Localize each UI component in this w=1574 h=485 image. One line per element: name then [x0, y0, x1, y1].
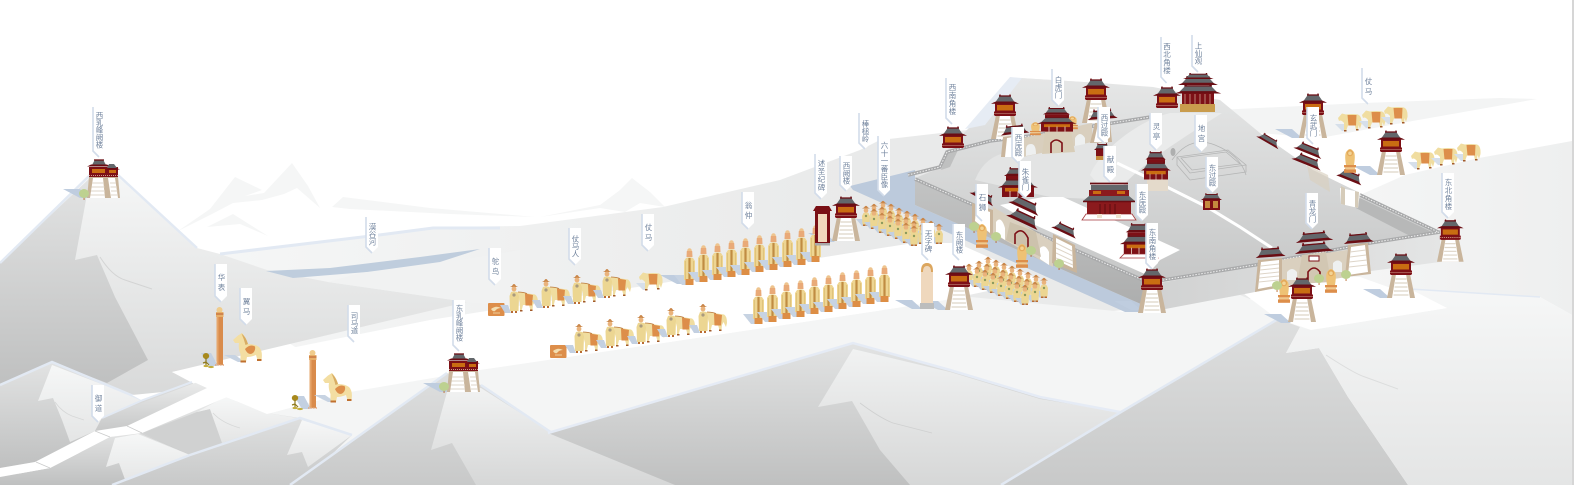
label: 棒槌岭: 棒槌岭 — [861, 119, 870, 144]
label: 御道 — [92, 385, 104, 422]
lion: south gate east — [1016, 244, 1028, 268]
pillar: 华表 — [201, 307, 224, 366]
underground palace outline: 地宫 — [1170, 142, 1246, 180]
label: 御道: 御道 — [94, 393, 103, 414]
tower: north gate right — [1377, 130, 1405, 175]
gate: 玄武门 — [1256, 94, 1365, 208]
label: 东庑殿 — [1136, 184, 1148, 221]
tower: 东阙楼 — [945, 266, 973, 310]
label: 青龙门 — [1306, 193, 1318, 229]
tree 2 — [439, 382, 449, 393]
relief: ostrich — [488, 303, 504, 316]
label: 上仙观: 上仙观 — [1194, 42, 1203, 66]
south inner plaza — [1000, 197, 1180, 275]
wall crests — [908, 116, 1440, 283]
tree — [79, 189, 89, 200]
mausoleum hill — [915, 78, 1440, 282]
label: 漠谷河 — [366, 217, 378, 253]
pillar: 华表 2 — [294, 350, 317, 409]
label: 白虎门: 白虎门 — [1054, 75, 1063, 100]
pavilion: 灵亭 — [1141, 151, 1171, 191]
label: 东阙楼 — [953, 224, 965, 260]
label: 仗马 (north-east): 仗马 — [1364, 76, 1373, 98]
stele: 无字碑 — [920, 263, 934, 309]
east plain — [1300, 141, 1572, 315]
tower: east gate right — [1387, 254, 1415, 298]
label: 西阙楼 — [840, 156, 852, 191]
north plain band — [1217, 98, 1537, 138]
winged horse 2 — [314, 373, 352, 402]
east wall face — [1143, 232, 1440, 310]
row: stone guards south — [743, 265, 890, 324]
label: 司马道 — [348, 305, 360, 342]
gate: 朱雀门 — [970, 185, 1079, 273]
hill light areas — [941, 77, 1432, 236]
label: 无字碑 — [922, 223, 934, 260]
label: 灵亭: 灵亭 — [1152, 122, 1161, 142]
gate: 青龙门 — [1255, 230, 1374, 292]
big left mountain — [0, 175, 467, 480]
trees: east gate — [1272, 270, 1351, 292]
label: 翁仲 — [742, 192, 754, 229]
label: 棒槌岭 — [859, 113, 871, 149]
temple: 上仙观 — [1175, 73, 1221, 112]
label: 西南角楼: 西南角楼 — [948, 83, 957, 116]
label: 述圣纪碑 — [815, 154, 827, 199]
row: horse and handlers south — [565, 304, 727, 353]
label: 西庑殿: 西庑殿 — [1014, 134, 1023, 158]
hall: 东庑殿 — [1120, 223, 1158, 258]
officials east group — [959, 257, 1048, 305]
label: 西乳峰阙楼 — [93, 107, 105, 157]
label: 鸵鸟 — [489, 248, 501, 285]
page edge — [1572, 0, 1574, 485]
trees: south gate — [969, 222, 1064, 270]
spirit road on the hill — [1117, 163, 1272, 248]
label: 东阙楼: 东阙楼 — [955, 230, 964, 255]
south wall face — [915, 180, 1143, 305]
label: 灵亭 — [1150, 113, 1162, 150]
label: 西阙楼: 西阙楼 — [842, 162, 851, 186]
tower: 西北角楼 — [1153, 86, 1181, 108]
label: 朱雀门: 朱雀门 — [1021, 167, 1030, 192]
tower: 西阙楼 — [832, 196, 860, 241]
relief: ostrich 2 — [550, 345, 566, 358]
label: 六十一蕃臣像 — [878, 136, 890, 196]
lion: east gate south — [1278, 279, 1290, 303]
blue shadow strip along south wall — [850, 170, 1143, 312]
label: 仗马: 仗马 — [644, 222, 653, 244]
label: 东过殿 — [1206, 157, 1218, 193]
horses: north-east row — [1335, 106, 1481, 170]
label: 玄武门: 玄武门 — [1309, 113, 1318, 138]
shrub — [203, 353, 214, 368]
label: 西北角楼 — [1161, 37, 1172, 83]
tower: 西乳峰阙楼 — [87, 160, 120, 198]
label: 石狮 — [976, 184, 988, 221]
label: 仗马人 — [569, 228, 581, 265]
shrub 2 — [292, 395, 303, 410]
label: 无字碑: 无字碑 — [924, 230, 933, 254]
stele: 述圣纪碑 — [813, 206, 832, 246]
hall: 东过殿 — [1201, 193, 1222, 210]
label: 华表: 华表 — [217, 272, 226, 294]
label: 仗马 (north-east) — [1362, 68, 1374, 104]
plaza: 青龙门 front — [1243, 277, 1447, 330]
label: 东南角楼: 东南角楼 — [1148, 227, 1157, 261]
label: 献殿: 献殿 — [1106, 154, 1115, 176]
label: 翁仲: 翁仲 — [744, 200, 753, 222]
gate: 白虎门 — [1000, 107, 1118, 157]
lower mountains — [112, 289, 1572, 485]
label: 上仙观 — [1192, 35, 1204, 72]
lion: east gate north — [1325, 269, 1337, 293]
label: 翼马 — [240, 288, 252, 325]
label: 西庑殿 — [1012, 127, 1024, 163]
label: 仗马人: 仗马人 — [571, 234, 580, 258]
label: 华表 — [215, 264, 227, 302]
label: 六十一蕃臣像: 六十一蕃臣像 — [880, 140, 889, 188]
label: 西乳峰阙楼: 西乳峰阙楼 — [95, 111, 104, 149]
label: 地宫 — [1195, 115, 1207, 152]
label: 司马道: 司马道 — [350, 312, 359, 336]
hall: 献殿 — [1082, 184, 1136, 220]
tower: east gate front — [1288, 278, 1316, 322]
label: 朱雀门 — [1019, 161, 1031, 198]
row: stone guards north — [674, 225, 821, 285]
label: 东乳峰阙楼: 东乳峰阙楼 — [455, 303, 464, 342]
lion: south gate west — [976, 224, 988, 248]
tower: 东南角楼 — [1138, 268, 1166, 313]
tower: 西南角楼 — [939, 126, 967, 148]
winged horse — [224, 333, 262, 362]
label: 仗马 — [642, 214, 654, 251]
tower: 东乳峰阙楼 — [447, 354, 480, 392]
label: 白虎门 — [1052, 69, 1064, 106]
causeway — [172, 243, 1040, 414]
bottom-left mountains — [0, 362, 300, 485]
tower: west gate rear left — [991, 94, 1019, 139]
label: 东北角楼: 东北角楼 — [1444, 177, 1453, 211]
back plain — [220, 78, 1290, 350]
label: 青龙门: 青龙门 — [1308, 199, 1317, 224]
lion: north gate — [1344, 149, 1356, 173]
hall: 西过殿 — [1094, 143, 1110, 160]
label: 述圣纪碑: 述圣纪碑 — [817, 158, 826, 192]
plain below causeway — [267, 295, 1320, 485]
label: 鸵鸟: 鸵鸟 — [491, 256, 500, 278]
label: 东乳峰阙楼 — [453, 300, 465, 351]
label: 西过殿: 西过殿 — [1100, 114, 1109, 138]
row: horse and handlers north — [500, 269, 663, 313]
label: 漠谷河: 漠谷河 — [368, 222, 377, 246]
label: 东庑殿: 东庑殿 — [1138, 190, 1147, 215]
gate: 朱雀门 rear pavilion — [998, 167, 1038, 197]
officials west group — [856, 201, 943, 246]
label: 东过殿: 东过殿 — [1208, 163, 1217, 188]
label: 西北角楼: 西北角楼 — [1162, 42, 1172, 75]
ground shadows — [63, 129, 1390, 392]
imperial road: 御道 — [0, 372, 267, 477]
label: 翼马: 翼马 — [242, 297, 251, 318]
label: 石狮: 石狮 — [978, 193, 987, 214]
label: 献殿 — [1104, 146, 1116, 182]
far mountains — [178, 163, 665, 236]
label: 东北角楼 — [1442, 173, 1454, 218]
label: 西南角楼 — [946, 78, 958, 124]
river: 漠谷河 — [220, 228, 520, 307]
label: 东南角楼 — [1146, 223, 1158, 269]
tower: 东北角楼 — [1437, 219, 1464, 262]
label: 地宫: 地宫 — [1197, 123, 1206, 144]
label: 玄武门 — [1307, 107, 1319, 144]
tower: west gate rear right — [1082, 78, 1110, 123]
label: 西过殿 — [1098, 107, 1110, 143]
